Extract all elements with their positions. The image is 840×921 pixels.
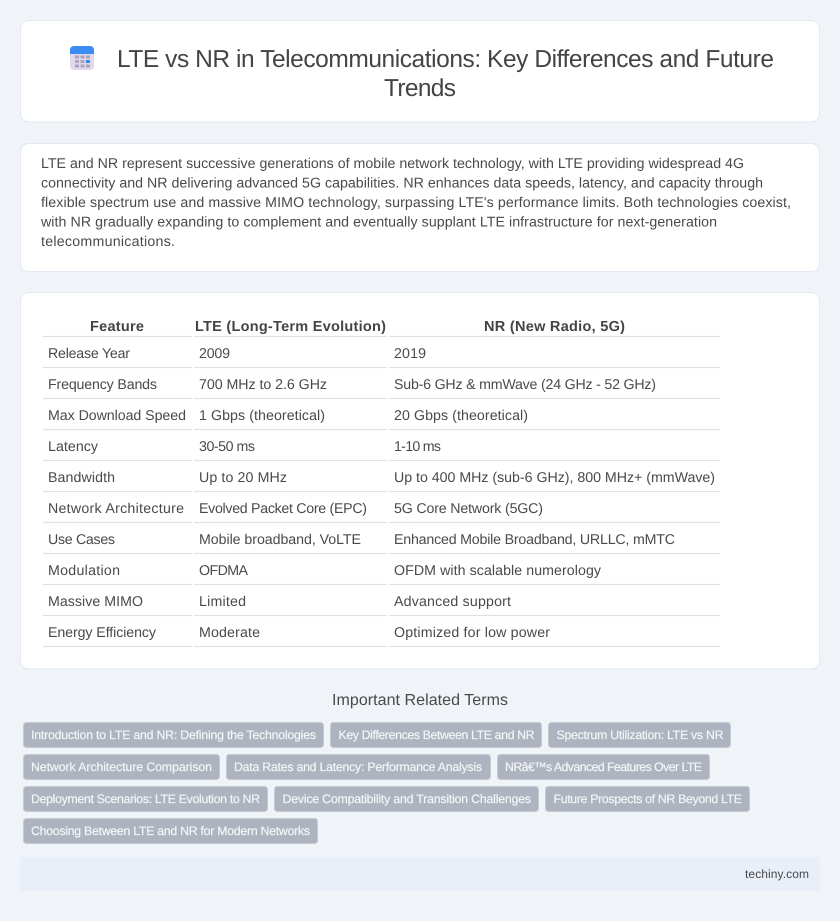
footer source: techiny.com (745, 867, 809, 881)
table header row: NR (New Radio, 5G) (484, 319, 625, 335)
footer bar (20, 857, 820, 891)
table row: massive mimo (43, 594, 720, 616)
tag: Data Rates and Latency: Performance Analysis (234, 760, 482, 774)
tag (498, 754, 710, 780)
intro text block (40, 156, 791, 250)
table row: bandwidth (43, 470, 720, 492)
related term tags (24, 722, 750, 844)
table row: modulation: OFDMA (199, 563, 249, 579)
tag: Network Architecture Comparison (31, 760, 212, 774)
table row: release year: 2009 (199, 346, 230, 362)
tag (274, 786, 538, 812)
table row: use cases: Use Cases (48, 532, 115, 548)
table row: bandwidth: Bandwidth (48, 470, 115, 486)
table row: latency: Latency (48, 439, 99, 455)
tag (24, 818, 318, 844)
tag: Device Compatibility and Transition Challenges (282, 792, 531, 806)
tag (24, 786, 268, 812)
intro text block: with NR gradually expanding to complement and eventually supplant LTE infrastructure for next-generation (40, 214, 717, 230)
tag: Introduction to LTE and NR: Defining the Technologies (31, 728, 316, 742)
title: Trends (384, 75, 456, 102)
table row: use cases: Mobile broadband, VoLTE (199, 532, 361, 548)
table row: network architecture: Network Architecture (48, 501, 184, 517)
table row: bandwidth: Up to 20 MHz (199, 470, 287, 486)
table row: release year: 2019 (394, 346, 426, 362)
tag: Future Prospects of NR Beyond LTE (554, 792, 742, 806)
table row: network architecture: 5G Core Network (5GC) (394, 501, 543, 517)
table row: use cases (43, 532, 720, 554)
table row: network architecture: Evolved Packet Core (EPC) (199, 501, 367, 517)
tag: Key Differences Between LTE and NR (338, 728, 535, 742)
panel: comparison table (20, 292, 820, 669)
tag: Choosing Between LTE and NR for Modern Networks (31, 824, 310, 838)
table header row: LTE (Long-Term Evolution) (195, 319, 386, 335)
table row: frequency bands: Frequency Bands (48, 377, 157, 393)
table row: energy efficiency: Optimized for low power (394, 625, 550, 641)
table row: max download speed: Max Download Speed (48, 408, 186, 424)
table row: massive mimo: Massive MIMO (48, 594, 143, 610)
tag (330, 722, 542, 748)
table row: frequency bands: 700 MHz to 2.6 GHz (199, 377, 327, 393)
table row: energy efficiency: Energy Efficiency (48, 625, 157, 641)
tag: NRâ€™s Advanced Features Over LTE (505, 760, 702, 774)
table row: latency (43, 439, 720, 460)
tag (548, 722, 730, 748)
table row: max download speed: 1 Gbps (theoretical) (199, 408, 325, 424)
title: LTE vs NR in Telecommunications: Key Differences and Future (117, 46, 774, 73)
tag: Deployment Scenarios: LTE Evolution to NR (31, 792, 260, 806)
intro text block: telecommunications. (41, 234, 175, 250)
tag (546, 786, 750, 812)
table row: energy efficiency (43, 625, 720, 646)
table row: release year (43, 346, 720, 368)
table row: massive mimo: Advanced support (394, 594, 511, 610)
table row: massive mimo: Limited (199, 594, 246, 610)
table header row: Feature (90, 319, 144, 335)
tag (24, 754, 220, 780)
table row: bandwidth: Up to 400 MHz (sub-6 GHz), 800 MHz+ (mmWave) (394, 470, 715, 486)
heading: important related terms: Important Related Terms (332, 692, 508, 709)
icon: calendar (70, 46, 94, 70)
table row: modulation: OFDM with scalable numerology (394, 563, 602, 579)
table row: use cases: Enhanced Mobile Broadband, URLLC, mMTC (394, 532, 675, 548)
table row: latency: 1-10 ms (394, 439, 441, 455)
table row: frequency bands: Sub-6 GHz & mmWave (24 GHz - 52 GHz) (394, 377, 656, 393)
table row: release year: Release Year (48, 346, 130, 362)
intro text block: LTE and NR represent successive generations of mobile network technology, with LTE providing widespread 4G (41, 156, 744, 172)
table row: energy efficiency: Moderate (199, 625, 260, 641)
table row: modulation (43, 563, 720, 584)
table row: latency: 30-50 ms (199, 439, 255, 455)
tag (24, 722, 324, 748)
table row: network architecture (43, 501, 720, 522)
table row: max download speed (43, 408, 720, 430)
title (117, 46, 774, 102)
intro text block: connectivity and NR delivering advanced 5G capabilities. NR enhances data speeds, latency, and capacity through (41, 176, 763, 192)
tag: Spectrum Utilization: LTE vs NR (556, 728, 724, 742)
panel: introduction (20, 144, 820, 272)
table row: modulation: Modulation (48, 563, 120, 579)
table row: frequency bands (43, 377, 720, 398)
intro text block: flexible spectrum use and massive MIMO technology, surpassing LTE's performance limits. Both technologies coexist, (41, 195, 791, 211)
panel: title header (20, 20, 820, 122)
tag (226, 754, 490, 780)
table header row (43, 319, 720, 336)
table row: max download speed: 20 Gbps (theoretical) (394, 408, 528, 424)
